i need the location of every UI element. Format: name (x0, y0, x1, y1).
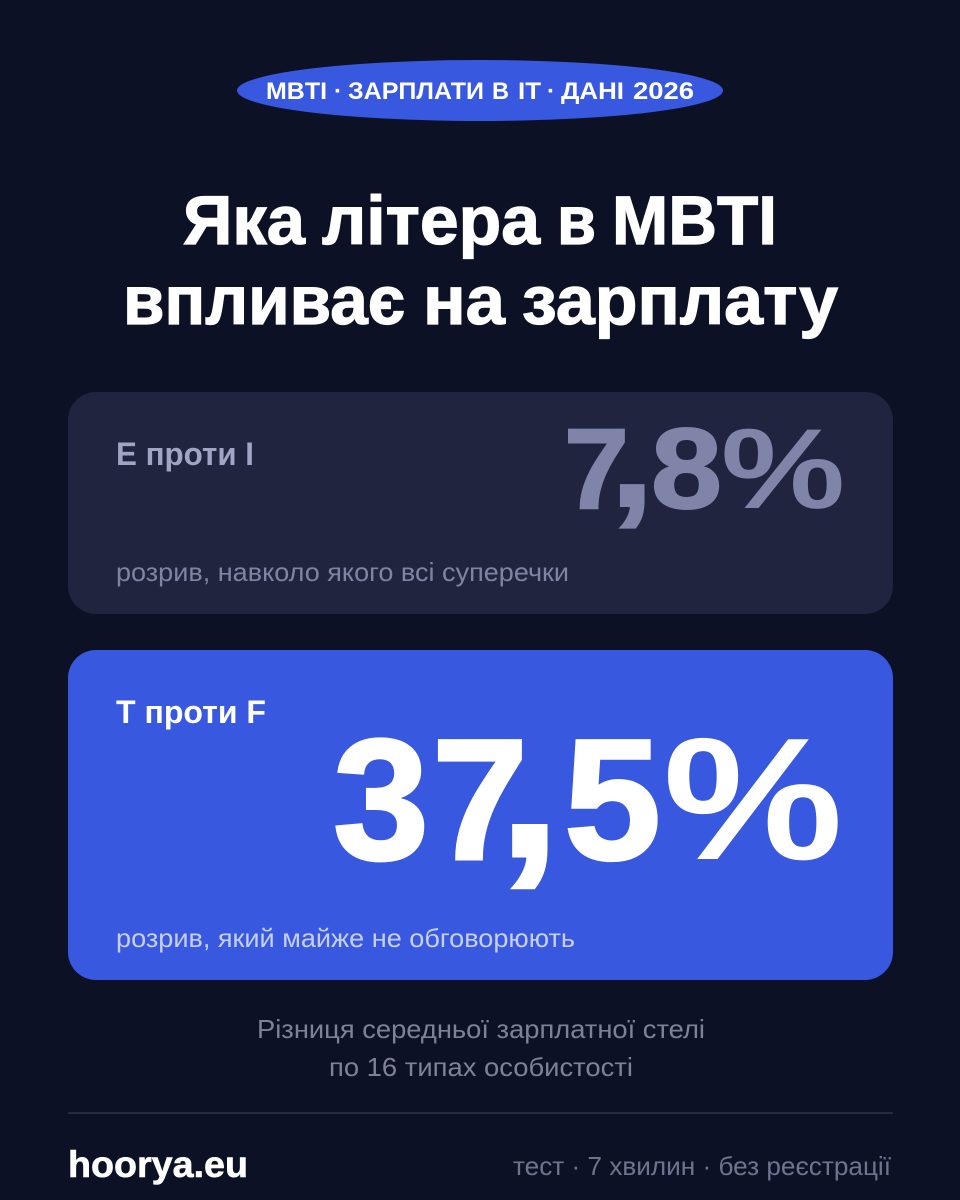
panel: E versus I (68, 379, 893, 614)
panel caption: E versus I: розрив, навколо якого всі суперечки (116, 557, 569, 587)
footer: test details: тест · 7 хвилин · без реєстрації (513, 1151, 891, 1181)
value: 37,5%: 7 (432, 704, 528, 896)
badge: topic and year: ДАНІ (561, 78, 624, 105)
value: 7,8%: % (721, 406, 845, 533)
value: 7,8%: , (610, 379, 654, 536)
panel label: E versus I: E проти I (116, 436, 254, 472)
note: what the difference measures (257, 1014, 705, 1082)
value: 37,5%: % (663, 701, 843, 896)
value: 37,5%: , (498, 671, 561, 900)
panel label: T versus F: T проти F (116, 694, 266, 730)
badge: topic and year: MBTI (266, 78, 327, 105)
title: впливає (123, 262, 405, 339)
title: MBTI (612, 182, 777, 259)
value: 7,8%: 7 (564, 406, 629, 533)
title: в (557, 182, 596, 259)
note: what the difference measures: Різниця середньої зарплатної стелі (257, 1014, 705, 1044)
value: 37,5% (333, 671, 843, 900)
footer: brand: hoorya.eu (68, 1144, 248, 1185)
badge: topic and year: ЗАРПЛАТИ (348, 78, 484, 105)
title: Яка (183, 182, 306, 259)
title: зарплату (522, 262, 838, 339)
badge: topic and year: · (547, 78, 555, 105)
value: 37,5%: 3 (333, 704, 429, 896)
title: на (423, 262, 506, 339)
badge: topic and year: В (492, 78, 509, 105)
badge: topic and year (237, 60, 723, 121)
badge: topic and year: IT (518, 78, 541, 105)
title: літера (322, 182, 541, 259)
panel caption: T versus F: розрив, який майже не обговорюють (116, 923, 575, 953)
note: what the difference measures: по 16 типах особистості (329, 1052, 633, 1082)
badge: topic and year: · (334, 78, 342, 105)
badge: topic and year: 2026 (633, 78, 694, 105)
title (123, 182, 838, 339)
value: 7,8%: 8 (651, 406, 722, 533)
value: 37,5%: 5 (564, 704, 661, 896)
panel: T versus F (68, 650, 893, 980)
value: 7,8% (564, 379, 845, 536)
